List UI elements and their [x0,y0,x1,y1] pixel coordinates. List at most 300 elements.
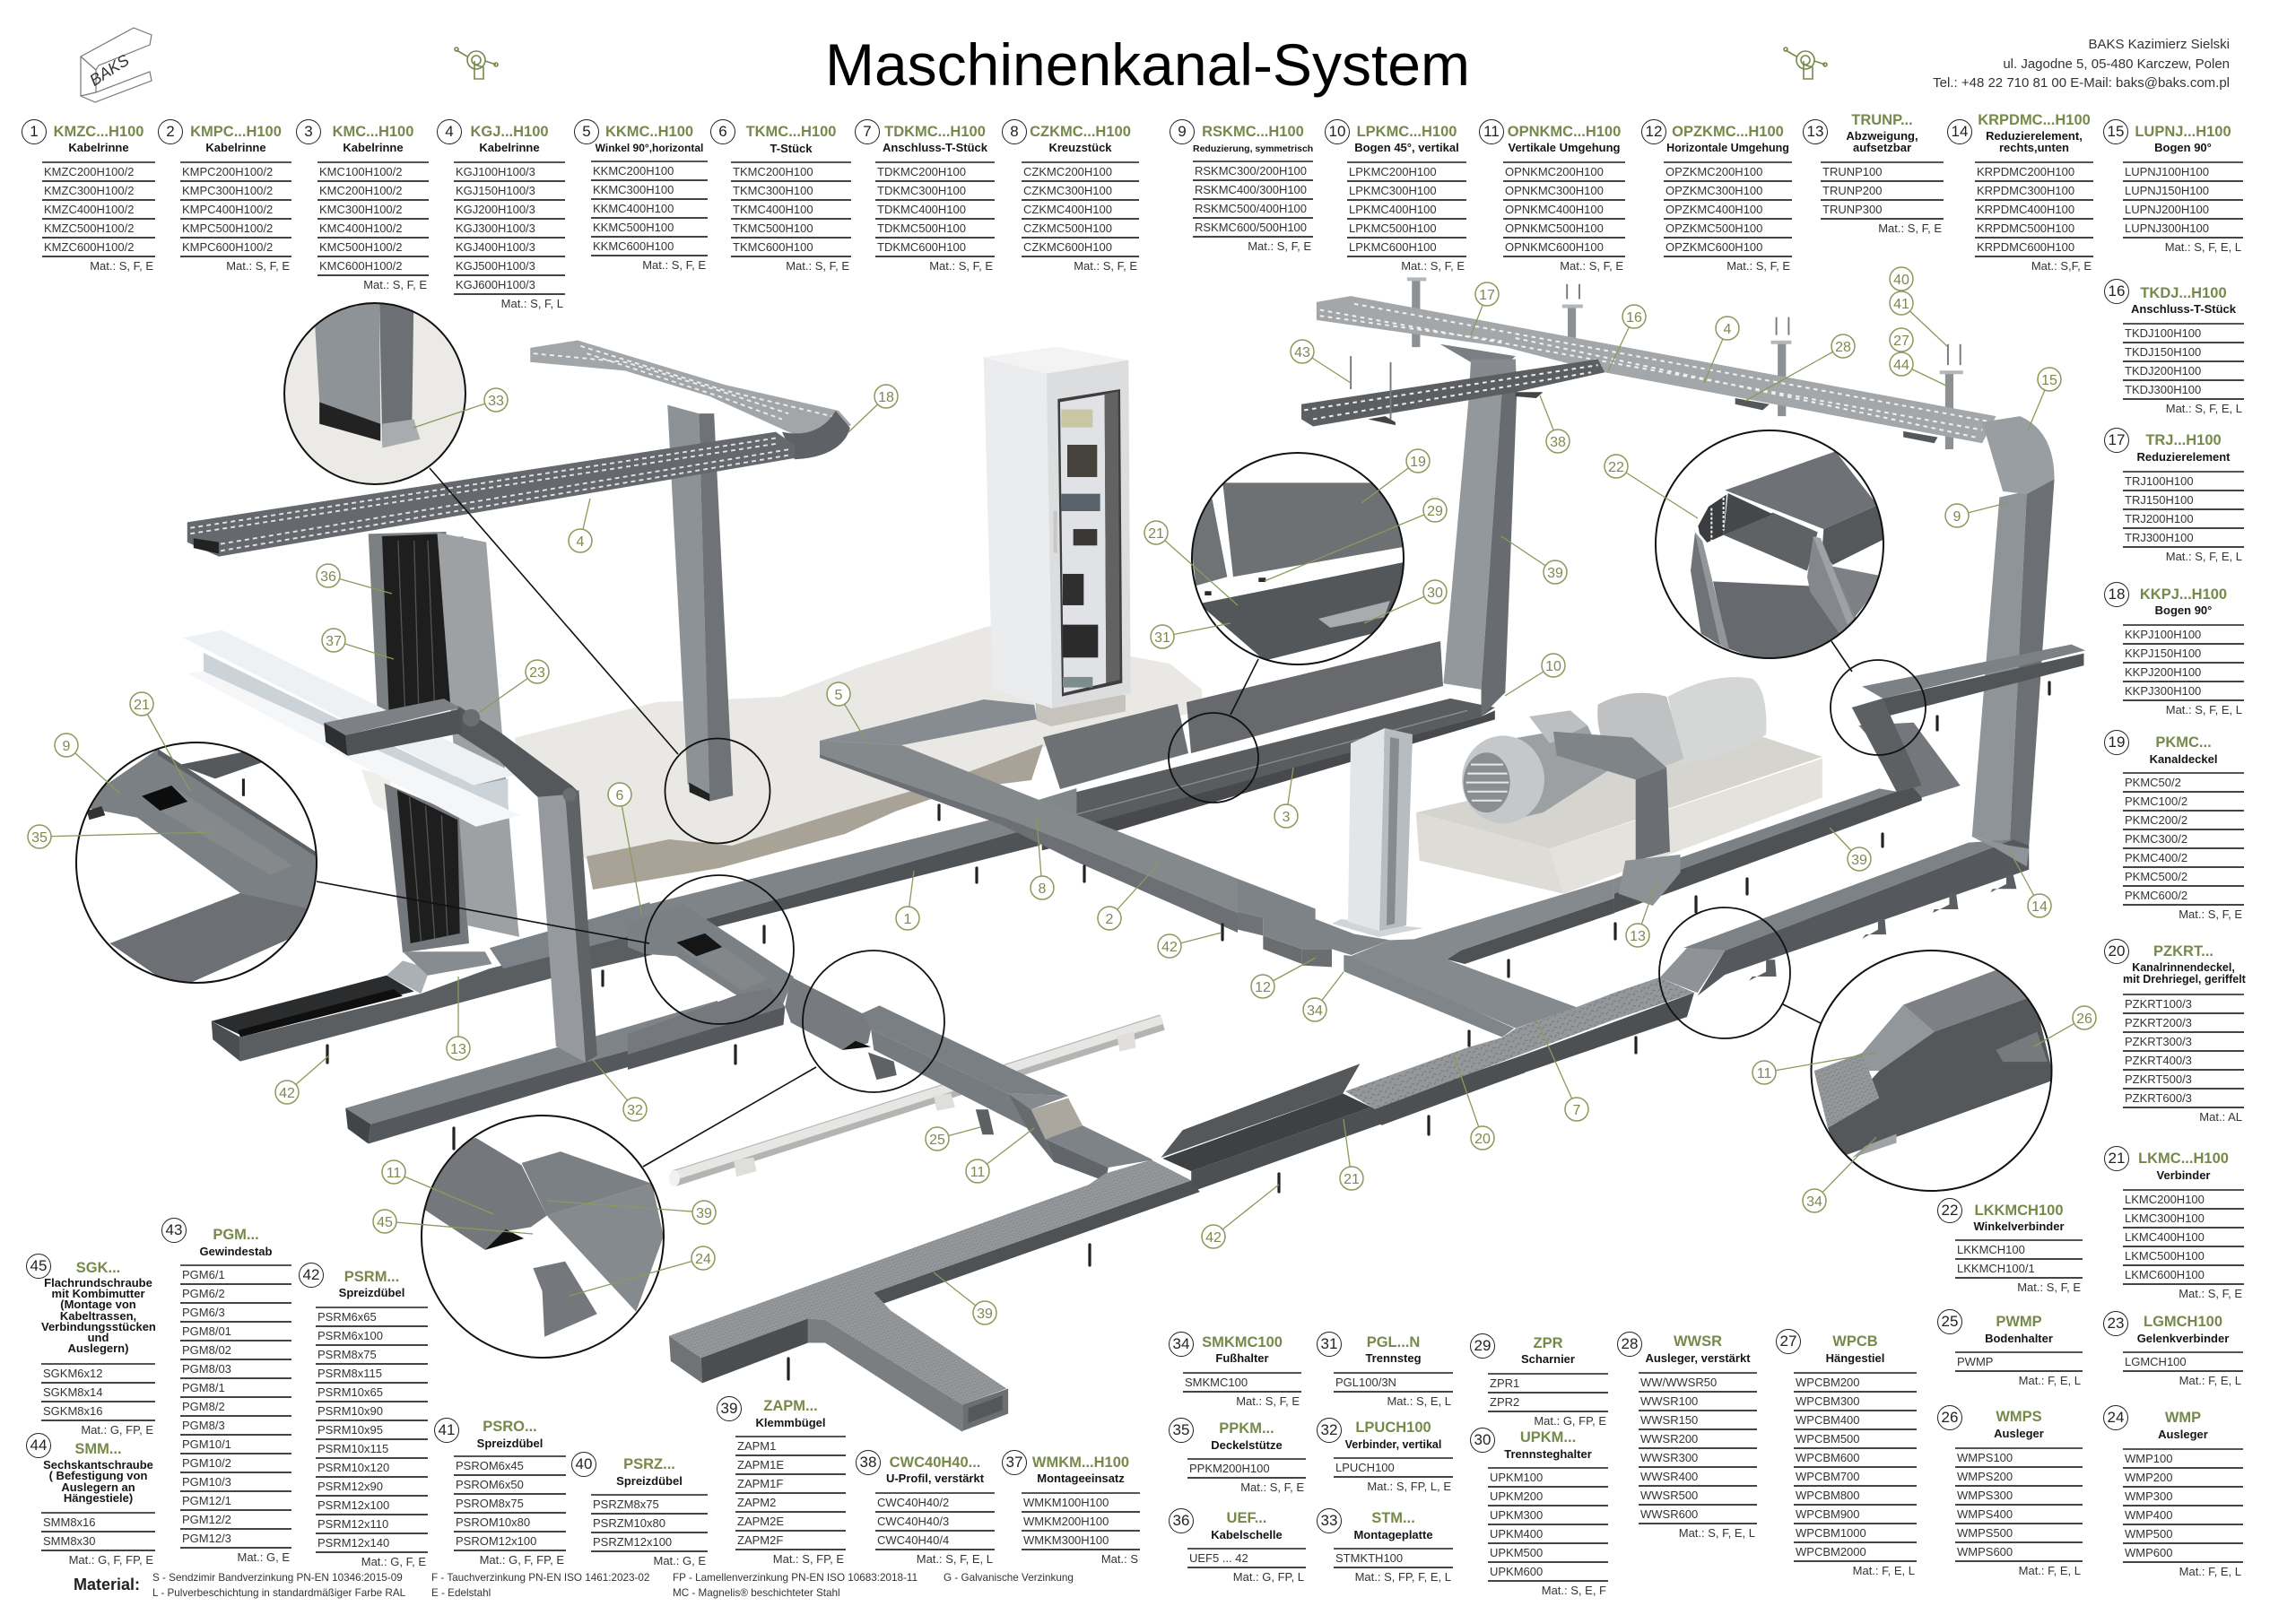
magnifier connector lines [317,468,1852,1167]
callout number labels: 18 [878,390,894,405]
callout number labels: 1 [904,912,912,927]
part 18 KKPJ: KKPJ150H100 [2125,647,2201,660]
legend text: L - Pulverbeschichtung in standardmäßiger Farbe RAL [152,1587,405,1599]
pipe with clamps [669,1020,1162,1186]
part 40 PSRZ: 40 [576,1455,592,1472]
part 39 ZAPM: ZAPM2F [737,1533,783,1547]
part 23 LGMCH [2103,1311,2243,1390]
part 30 UPKM [1470,1428,1608,1601]
part 16 TKDJ: TKDJ300H100 [2125,383,2201,396]
part 33 STM: STMKTH100 [1335,1551,1403,1565]
callout number labels: 32 [627,1103,643,1118]
part 20 PZKRT: PZKRT600/3 [2125,1091,2192,1105]
part 24 WMP: WMP300 [2125,1489,2172,1503]
part 9 RSKMC: RSKMC...H100 [1202,124,1304,140]
part 39 ZAPM: ZAPM1E [737,1458,784,1472]
callout number labels: 12 [1255,980,1271,995]
part 20 PZKRT: PZKRT200/3 [2125,1016,2192,1029]
part 27 WPCB: Hängestiel [1826,1351,1884,1365]
callout number labels: 28 [1835,340,1851,355]
part 30 UPKM: UPKM... [1520,1429,1576,1446]
callout number labels: 11 [387,1166,401,1181]
part 33 STM: 33 [1321,1512,1337,1529]
part 26 WMPS: WMPS100 [1957,1451,2013,1464]
part 5 KKMC: KKMC..H100 [605,124,693,140]
part 30 UPKM: 30 [1474,1431,1491,1448]
part 14 KRPDMC: KRPDMC300H100 [1977,184,2074,197]
part 27 WPCB [1776,1329,1917,1580]
part 21 LKMC: Verbinder [2157,1168,2210,1182]
part 27 WPCB: WPCBM2000 [1796,1545,1866,1559]
part 6 TKMC [710,119,851,273]
part 14 KRPDMC: Mat.: S,F, E [2031,259,2092,273]
part 7 TDKMC: Mat.: S, F, E [929,259,993,273]
callout number labels: 4 [1724,322,1732,337]
part 27 WPCB: WPCBM300 [1796,1394,1860,1408]
part 7 TDKMC: TDKMC...H100 [884,124,986,140]
part 22 LKKMCH: LKKMCH100 [1974,1203,2064,1219]
part 30 UPKM: UPKM600 [1490,1565,1543,1578]
part 10 LPKMC: LPKMC200H100 [1349,165,1437,178]
legend heading: Material: [74,1576,140,1593]
part 34 SMKMC: 34 [1173,1335,1189,1352]
part 14 KRPDMC: KRPDMC500H100 [1977,221,2074,235]
callout number labels: 23 [529,665,545,681]
callout number labels: 11 [970,1165,985,1180]
part 28 WWSR: WWSR100 [1640,1394,1698,1408]
part 28 WWSR: WWSR500 [1640,1489,1698,1502]
part 30 UPKM: Mat.: S, E, F [1542,1584,1606,1597]
company address [1933,37,2230,91]
part 23 LGMCH: Gelenkverbinder [2137,1332,2229,1345]
part 20 PZKRT: Kanalrinnendeckel, [2132,961,2235,974]
part 41 PSRO: PSROM6x50 [456,1478,524,1491]
part 3 KMC: KMC500H100/2 [319,240,402,254]
part 29 ZPR: Scharnier [1521,1352,1575,1366]
part 9 RSKMC: Reduzierung, symmetrisch [1193,143,1313,154]
callout number labels: 44 [1893,358,1909,373]
part 35 PPKM: 35 [1173,1421,1189,1438]
part 41 PSRO: PSROM6x45 [456,1459,524,1472]
part 20 PZKRT: PZKRT300/3 [2125,1035,2192,1048]
part 5 KKMC: KKMC300H100 [593,183,674,196]
part 43 PGM: PGM12/1 [182,1494,231,1507]
part 25 PWMP: Bodenhalter [1985,1332,2053,1345]
part 39 ZAPM: ZAPM1 [737,1439,776,1453]
part 45 SGK: SGKM6x12 [43,1367,102,1380]
part 19 PKMC: PKMC... [2155,734,2212,751]
part 28 WWSR: WWSR200 [1640,1432,1698,1446]
part 10 LPKMC: LPKMC300H100 [1349,184,1437,197]
part 21 LKMC: LKMC200H100 [2125,1193,2205,1206]
part 42 PSRM: PSRM12x100 [317,1498,389,1512]
detail: left T with support [76,742,320,989]
part 36 UEF: Mat.: G, FP, L [1233,1570,1304,1584]
small detail circles [645,660,1926,1092]
part 44 SMM: SMM8x30 [43,1534,96,1548]
part 45 SGK: Verbindungsstücken [41,1320,156,1333]
part 43 PGM: PGM6/3 [182,1306,225,1319]
part 16 TKDJ: Mat.: S, F, E, L [2166,402,2242,415]
part 13 TRUNP: TRUNP200 [1822,184,1882,197]
part 42 PSRM: 42 [303,1266,319,1283]
part 20 PZKRT: PZKRT... [2153,943,2213,959]
part 43 PGM: PGM8/2 [182,1400,225,1413]
part 13 TRUNP: Mat.: S, F, E [1878,221,1942,235]
part 16 TKDJ: TKDJ100H100 [2125,326,2201,340]
part 15 LUPNJ: 15 [2108,123,2124,140]
part 42 PSRM: PSRM6x65 [317,1310,377,1324]
part 5 KKMC: KKMC600H100 [593,239,674,253]
part 3 KMC: Kabelrinne [343,141,404,154]
part 39 ZAPM: ZAPM... [763,1398,818,1414]
part 43 PGM: PGM8/01 [182,1324,231,1338]
part 45 SGK: Kabeltrassen, [60,1309,136,1323]
part 35 PPKM: PPKM200H100 [1189,1462,1270,1475]
part 12 OPZKMC [1641,119,1792,273]
part 11 OPNKMC: OPNKMC400H100 [1505,203,1604,216]
callout number labels: 6 [616,788,624,803]
part 45 SGK: SGKM8x14 [43,1385,102,1399]
part 38 CWC: CWC40H40... [890,1454,980,1471]
callout number labels: 35 [31,830,48,846]
part 23 LGMCH: Mat.: F, E, L [2179,1374,2241,1387]
part 9 RSKMC: 9 [1178,123,1187,140]
part 23 LGMCH: 23 [2108,1315,2124,1332]
part 28 WWSR: WWSR [1674,1333,1722,1350]
part 7 TDKMC [855,119,995,273]
callout number labels: 2 [1106,912,1114,927]
part 28 WWSR: WW/WWSR50 [1640,1376,1717,1389]
part 15 LUPNJ: LUPNJ300H100 [2125,221,2209,235]
lower duct 32 [345,1001,718,1144]
motor connection duct 13 [1553,732,1680,906]
part 21 LKMC: Mat.: S, F, E [2179,1287,2242,1300]
part 20 PZKRT: PZKRT100/3 [2125,997,2192,1011]
part 18 KKPJ: 18 [2109,586,2125,603]
legend text [152,1572,405,1597]
part 15 LUPNJ: Mat.: S, F, E, L [2165,240,2241,254]
callout number labels: 13 [450,1042,466,1057]
part 5 KKMC: KKMC400H100 [593,202,674,215]
part 26 WMPS: WMPS200 [1957,1470,2013,1483]
callout number labels: 45 [377,1215,393,1230]
part 12 OPZKMC: OPZKMC600H100 [1665,240,1762,254]
part 13 TRUNP: TRUNP100 [1822,165,1882,178]
callout number labels: 31 [1154,630,1170,646]
logo text: BAKS [86,51,132,90]
part 6 TKMC: Mat.: S, F, E [786,259,849,273]
part 44 SMM: Mat.: G, F, FP, E [69,1553,153,1567]
company address: ul. Jagodne 5, 05-480 Karczew, Polen [2003,56,2230,72]
part 28 WWSR: Ausleger, verstärkt [1645,1351,1751,1365]
part 42 PSRM: PSRM10x115 [317,1442,388,1455]
part 1 KMZC: KMZC300H100/2 [44,184,134,197]
part 26 WMPS: WMPS300 [1957,1489,2013,1502]
part 24 WMP: WMP600 [2125,1546,2172,1559]
part 30 UPKM: UPKM400 [1490,1527,1543,1541]
part 30 UPKM: UPKM300 [1490,1508,1543,1522]
part 9 RSKMC: RSKMC500/400H100 [1195,202,1307,215]
part 40 PSRZ: PSRZM8x75 [593,1498,659,1511]
part 18 KKPJ: KKPJ200H100 [2125,665,2201,679]
part 37 WMKM: WMKM200H100 [1023,1515,1109,1528]
callout number labels: 39 [977,1307,993,1322]
part 11 OPNKMC: Vertikale Umgehung [1509,141,1620,154]
legend text column 3: FP - Lamellenverzinkung PN-EN ISO 10683:2018-11 [673,1572,918,1584]
part 44 SMM: SMM... [74,1441,122,1457]
part 12 OPZKMC: OPZKMC200H100 [1665,165,1762,178]
part 14 KRPDMC: KRPDMC200H100 [1977,165,2074,178]
part 17 TRJ: TRJ300H100 [2125,531,2194,544]
part 21 LKMC: LKMC400H100 [2125,1230,2205,1244]
part 2 KMPC: KMPC300H100/2 [182,184,273,197]
callout numbers [28,267,2096,1324]
part 33 STM [1317,1508,1453,1586]
part 26 WMPS: WMPS500 [1957,1526,2013,1540]
part 19 PKMC [2104,730,2244,921]
part 26 WMPS: Mat.: F, E, L [2019,1564,2081,1577]
part 16 TKDJ: TKDJ200H100 [2125,364,2201,378]
part 41 PSRO: PSRO... [483,1419,537,1435]
part 11 OPNKMC: Mat.: S, F, E [1560,259,1623,273]
part 42 PSRM: Spreizdübel [339,1286,404,1299]
part 12 OPZKMC: OPZKMC500H100 [1665,221,1762,235]
part 10 LPKMC: LPKMC600H100 [1349,240,1437,254]
part 12 OPZKMC: Horizontale Umgehung [1666,142,1789,154]
part 29 ZPR: ZPR1 [1490,1376,1519,1390]
part 45 SGK: mit Kombimutter [52,1287,145,1300]
part 1 KMZC: KMZC600H100/2 [44,240,134,254]
part 11 OPNKMC: OPNKMC...H100 [1508,124,1621,140]
part 10 LPKMC: 10 [1329,123,1345,140]
part 17 TRJ: Reduzierelement [2136,450,2231,464]
part 20 PZKRT: 20 [2109,942,2125,959]
callout number labels: 9 [1953,509,1961,525]
part 14 KRPDMC: KRPDMC...H100 [1978,112,2091,128]
part 42 PSRM: Mat.: G, F, E [361,1555,426,1568]
legend text column 3: MC - Magnelis® beschichteter Stahl [673,1587,840,1599]
part 27 WPCB: 27 [1780,1333,1796,1350]
part 22 LKKMCH: LKKMCH100/1 [1957,1262,2035,1275]
part 43 PGM: Gewindestab [200,1245,272,1258]
part 38 CWC: 38 [860,1454,876,1471]
part 12 OPZKMC: OPZKMC400H100 [1665,203,1762,216]
part 6 TKMC: 6 [718,123,727,140]
callout number labels: 9 [63,739,71,754]
callout number labels: 3 [1283,810,1291,825]
part 13 TRUNP: Abzweigung, [1846,129,1918,143]
vertical cable channel with lid [369,532,519,952]
part 24 WMP: WMP400 [2125,1508,2172,1522]
part 18 KKPJ: Mat.: S, F, E, L [2166,703,2242,716]
part 11 OPNKMC: OPNKMC600H100 [1505,240,1604,254]
part 28 WWSR [1617,1332,1757,1543]
part 8 CZKMC: 8 [1010,123,1019,140]
part 38 CWC [856,1450,995,1569]
part 43 PGM: Mat.: G, E [237,1550,290,1564]
part 45 SGK: Auslegern) [68,1341,128,1355]
part 42 PSRM: PSRM10x120 [317,1461,389,1474]
part 2 KMPC: KMPC200H100/2 [182,165,273,178]
part 21 LKMC: LKMC600H100 [2125,1268,2205,1281]
part 31 PGL: Trennsteg [1365,1351,1422,1365]
part 4 KGJ: KGJ100H100/3 [456,165,535,178]
part 19 PKMC: PKMC500/2 [2125,870,2187,883]
callout number labels: 20 [1474,1132,1491,1147]
part 24 WMP: WMP200 [2125,1471,2172,1484]
part 41 PSRO: 41 [439,1421,455,1438]
part 23 LGMCH: LGMCH100 [2125,1355,2187,1368]
part 45 SGK: 45 [30,1257,47,1274]
legend text column 4: G - Galvanische Verzinkung [944,1572,1074,1584]
part 31 PGL [1317,1332,1453,1411]
part 36 UEF: 36 [1173,1512,1189,1529]
part 7 TDKMC: TDKMC600H100 [877,240,966,254]
part 14 KRPDMC: KRPDMC400H100 [1977,203,2074,216]
callout number labels: 22 [1608,460,1624,475]
part 8 CZKMC: CZKMC500H100 [1023,221,1112,235]
part 35 PPKM [1169,1418,1306,1497]
part 33 STM: STM... [1371,1510,1415,1526]
part 43 PGM: PGM12/2 [182,1513,231,1526]
part 42 PSRM: PSRM10x95 [317,1423,383,1437]
part 30 UPKM: UPKM100 [1490,1471,1543,1484]
icon: touch hand right [1784,48,1827,79]
part 10 LPKMC: Bogen 45°, vertikal [1354,141,1459,154]
part 45 SGK: Mat.: G, FP, E [81,1423,153,1437]
part 21 LKMC: 21 [2109,1150,2125,1167]
part 4 KGJ: Mat.: S, F, L [501,297,563,310]
part 19 PKMC: PKMC100/2 [2125,794,2187,808]
part 7 TDKMC: TDKMC200H100 [877,165,966,178]
callout number labels: 21 [134,698,150,713]
part 44 SMM [26,1433,155,1567]
main duct 1 [644,788,1076,951]
part 34 SMKMC [1169,1332,1301,1411]
part 40 PSRZ: PSRZM12x100 [593,1535,672,1549]
part 6 TKMC: T-Stück [770,142,812,155]
part 24 WMP: WMP500 [2125,1527,2172,1541]
part 39 ZAPM: Mat.: S, FP, E [773,1552,844,1566]
part 16 TKDJ: 16 [2109,282,2125,300]
callout number labels: 27 [1893,334,1909,349]
part 8 CZKMC: CZKMC400H100 [1023,203,1112,216]
part 4 KGJ: KGJ300H100/3 [456,221,535,235]
part 8 CZKMC: CZKMC300H100 [1023,184,1112,197]
part 26 WMPS: WMPS [1996,1409,2042,1425]
part 27 WPCB: WPCBM900 [1796,1507,1860,1521]
central T and reducer [628,904,1153,1181]
part 1 KMZC: KMZC400H100/2 [44,203,134,216]
part 30 UPKM: UPKM500 [1490,1546,1543,1559]
part 29 ZPR: ZPR [1534,1335,1562,1351]
part 6 TKMC: TKMC600H100 [733,240,813,254]
part 9 RSKMC: RSKMC300/200H100 [1195,164,1307,178]
part 38 CWC: CWC40H40/2 [877,1496,949,1509]
part 20 PZKRT: mit Drehriegel, geriffelt [2123,973,2246,985]
icon: BAKS logo [81,28,152,102]
part 11 OPNKMC: OPNKMC300H100 [1505,184,1604,197]
part 40 PSRZ: PSRZM10x80 [593,1516,665,1530]
long chequer plate duct [669,1055,1525,1432]
junctions 5 and 2 [820,699,1238,933]
part 6 TKMC: TKMC200H100 [733,165,813,178]
legend text column 2: F - Tauchverzinkung PN-EN ISO 1461:2023-02 [431,1572,649,1584]
part 5 KKMC: KKMC200H100 [593,164,674,178]
part 19 PKMC: PKMC50/2 [2125,776,2181,789]
part 17 TRJ: Mat.: S, F, E, L [2166,550,2242,563]
part 31 PGL: PGL100/3N [1335,1376,1396,1389]
callout number labels: 14 [2031,899,2048,915]
part 19 PKMC: PKMC600/2 [2125,889,2187,902]
part 6 TKMC: TKMC300H100 [733,184,813,197]
part 27 WPCB: WPCBM800 [1796,1489,1860,1502]
part 2 KMPC [158,119,291,273]
part 19 PKMC: Kanaldeckel [2150,752,2217,766]
callout number labels: 13 [1630,929,1646,944]
part 34 SMKMC: Mat.: S, F, E [1236,1394,1300,1408]
part 20 PZKRT [2104,939,2246,1124]
part 16 TKDJ: TKDJ150H100 [2125,345,2201,359]
part 45 SGK: Flachrundschraube [44,1276,152,1289]
callout number labels: 42 [1161,940,1178,955]
part 36 UEF: Kabelschelle [1211,1528,1283,1541]
part 4 KGJ: 4 [445,123,454,140]
part 10 LPKMC: LPKMC400H100 [1349,203,1437,216]
part 36 UEF: UEF5 ... 42 [1189,1551,1248,1565]
part 42 PSRM: PSRM12x110 [317,1517,388,1531]
title: Maschinenkanal-System [825,31,1470,98]
callout number labels: 4 [577,534,585,550]
detail: cover and trough [1187,453,1420,664]
part 15 LUPNJ: LUPNJ100H100 [2125,165,2209,178]
part 12 OPZKMC: OPZKMC300H100 [1665,184,1762,197]
legend text column 3 [673,1572,918,1597]
part 24 WMP: WMP100 [2125,1452,2172,1465]
part 4 KGJ: KGJ200H100/3 [456,203,535,216]
part 2 KMPC: KMPC...H100 [190,124,282,140]
legend text: S - Sendzimir Bandverzinkung PN-EN 10346:2015-09 [152,1572,403,1584]
part 3 KMC: KMC400H100/2 [319,221,402,235]
part 5 KKMC: 5 [582,123,591,140]
part 42 PSRM: PSRM10x65 [317,1385,383,1399]
part 13 TRUNP: TRUNP... [1851,112,1913,128]
part 24 WMP [2103,1405,2243,1581]
part 27 WPCB: WPCBM200 [1796,1376,1860,1389]
part 14 KRPDMC: 14 [1952,123,1968,140]
electrical cabinet [984,347,1131,726]
part 13 TRUNP: TRUNP300 [1822,203,1882,216]
lid plate of cable channel [437,533,519,937]
part 37 WMKM [1002,1450,1140,1569]
part 15 LUPNJ: LUPNJ...H100 [2135,124,2231,140]
part 31 PGL: PGL...N [1367,1334,1420,1350]
part 6 TKMC: TKMC400H100 [733,203,813,216]
part 1 KMZC: KMZC200H100/2 [44,165,134,178]
part 27 WPCB: WPCB [1832,1333,1878,1350]
part 43 PGM: PGM12/3 [182,1532,231,1545]
part 39 ZAPM: Klemmbügel [755,1416,825,1429]
company address: BAKS Kazimierz Sielski [2088,37,2230,52]
part 39 ZAPM: ZAPM1F [737,1477,783,1490]
part 4 KGJ: KGJ400H100/3 [456,240,535,254]
part 13 TRUNP: aufsetzbar [1853,140,1911,154]
part 44 SMM: Hängestiele) [64,1491,133,1505]
callout number labels: 39 [1851,853,1867,868]
right vertical duct 9 with bends 15 and 14 [1660,416,2055,995]
part 5 KKMC: Mat.: S, F, E [642,258,706,272]
